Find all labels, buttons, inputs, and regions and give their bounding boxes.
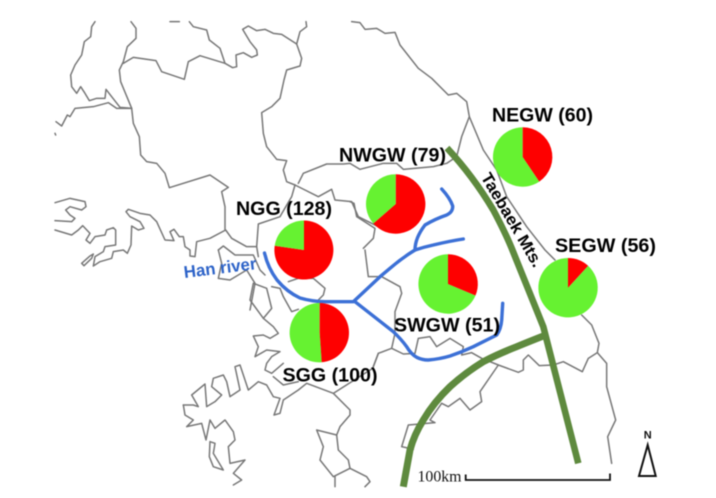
north arrow: N [644,429,652,441]
label: SEGW: SEGW (56) [555,236,656,257]
north arrow [639,429,656,476]
pie chart: NEGW [493,127,552,187]
scale bar: 100km [418,468,610,486]
pie chart: SEGW [538,258,598,317]
pie chart: SGG [290,303,349,362]
label: SGG: SGG (100) [282,366,378,386]
label: NGG: NGG (128) [236,199,332,220]
label: Taebaek Mts.: Taebaek Mts. [477,170,546,270]
pie chart: SWGW [418,254,478,314]
pie chart: NGG [274,220,333,279]
Taebaek mountain ridge [403,148,578,487]
label: Han river: Han river [183,254,258,282]
scale bar: 100km: 100km [418,468,462,486]
pie chart: NWGW [366,174,425,234]
label: SWGW: SWGW (51) [394,316,500,336]
Han river network [264,189,503,360]
label: NWGW: NWGW (79) [339,146,446,166]
base map: administrative boundaries and coastline [55,22,616,487]
label: NEGW: NEGW (60) [492,106,593,126]
